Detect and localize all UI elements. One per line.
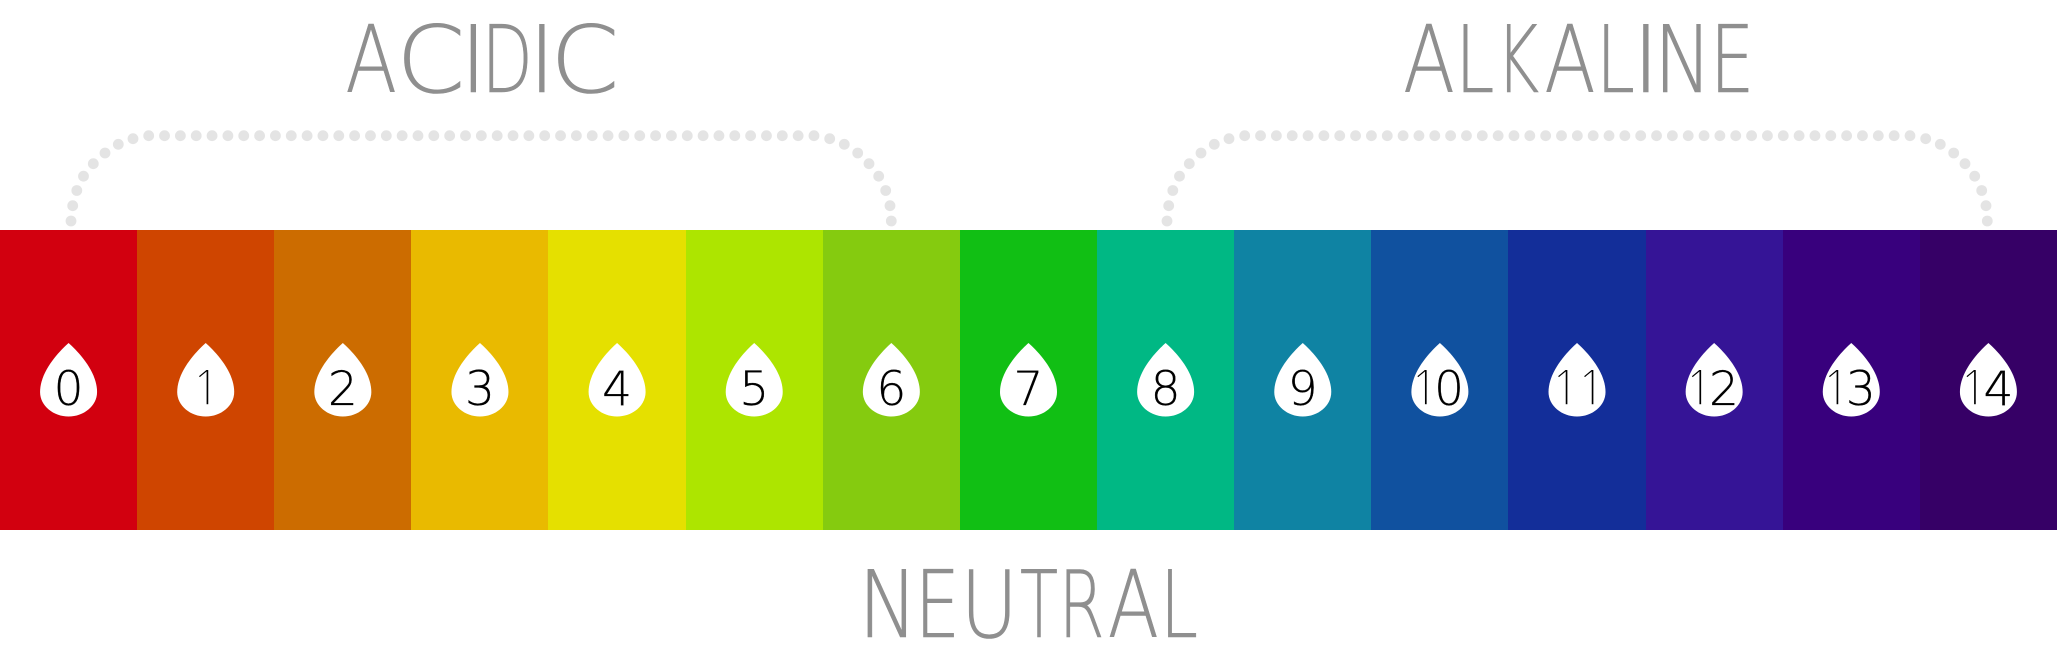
drop: pH 13 xyxy=(1821,343,1880,417)
drop: pH 13: 3 xyxy=(1846,362,1876,417)
drop: pH 10 xyxy=(1410,343,1468,417)
drop: pH 10: 1 xyxy=(1410,364,1439,412)
drop: pH 5: 5 xyxy=(739,362,769,417)
heading: acidic: A xyxy=(345,6,397,114)
heading: acidic: C xyxy=(550,6,619,114)
heading: alkaline: K xyxy=(1496,6,1539,114)
pH colour bands xyxy=(0,230,2057,530)
heading: neutral: A xyxy=(1108,551,1159,659)
drop: pH 13: 1 xyxy=(1821,364,1850,412)
drop: pH 12: 1 xyxy=(1684,364,1713,412)
drop: pH 12 xyxy=(1684,343,1743,417)
heading: acidic: I xyxy=(460,6,487,114)
heading: alkaline: E xyxy=(1710,6,1754,114)
heading: alkaline: A xyxy=(1544,6,1596,114)
heading: neutral: R xyxy=(1058,551,1105,659)
drop: pH 7 xyxy=(1000,343,1057,417)
heading: neutral: T xyxy=(1020,551,1058,659)
drop: pH 5 xyxy=(726,343,783,417)
drop: pH 7: 7 xyxy=(1014,362,1043,417)
heading: acidic: C xyxy=(396,6,465,114)
drop: pH 2 xyxy=(314,343,371,417)
drop: pH 2: 2 xyxy=(328,362,358,417)
dotted bracket: alkaline range xyxy=(1162,133,1993,226)
drop: pH 11: 1 xyxy=(1550,364,1580,412)
drop: pH 14: 4 xyxy=(1983,362,2013,417)
drop: pH 1: 1 xyxy=(191,364,220,412)
heading: neutral: E xyxy=(915,551,960,659)
drop: pH 4: 4 xyxy=(602,362,632,417)
drop: pH 12: 2 xyxy=(1709,362,1739,417)
drop: pH 0: 0 xyxy=(54,362,84,417)
heading: alkaline: I xyxy=(1632,6,1660,114)
drop: pH 8: 8 xyxy=(1151,362,1181,417)
drop: pH 9: 9 xyxy=(1288,362,1318,417)
drop: pH 14 xyxy=(1959,343,2017,417)
drop: pH 4 xyxy=(589,343,646,417)
heading: acidic: I xyxy=(528,6,556,114)
heading: alkaline: N xyxy=(1654,6,1712,114)
heading: neutral: U xyxy=(960,551,1018,659)
drop: pH 3: 3 xyxy=(465,362,495,417)
dotted bracket: acidic range xyxy=(66,133,897,226)
drop: pH 8 xyxy=(1137,343,1194,417)
drop: pH 14: 1 xyxy=(1959,364,1988,412)
heading: neutral: N xyxy=(858,551,918,659)
drop: pH 0 xyxy=(40,343,97,417)
drop: pH 11 xyxy=(1549,343,1606,416)
drop: pH 1 xyxy=(177,343,234,416)
drop: pH 6: 6 xyxy=(876,362,906,417)
drop: pH 10: 0 xyxy=(1434,362,1464,417)
drop: pH 9 xyxy=(1274,343,1331,417)
drop: pH 11: 1 xyxy=(1576,364,1606,412)
heading: alkaline: L xyxy=(1596,6,1635,114)
heading: alkaline: A xyxy=(1403,6,1455,114)
heading: alkaline: L xyxy=(1455,6,1494,114)
drop: pH 3 xyxy=(451,343,508,417)
heading: neutral: L xyxy=(1160,551,1198,659)
drop: pH 6 xyxy=(863,343,920,417)
heading: acidic: D xyxy=(482,6,533,114)
